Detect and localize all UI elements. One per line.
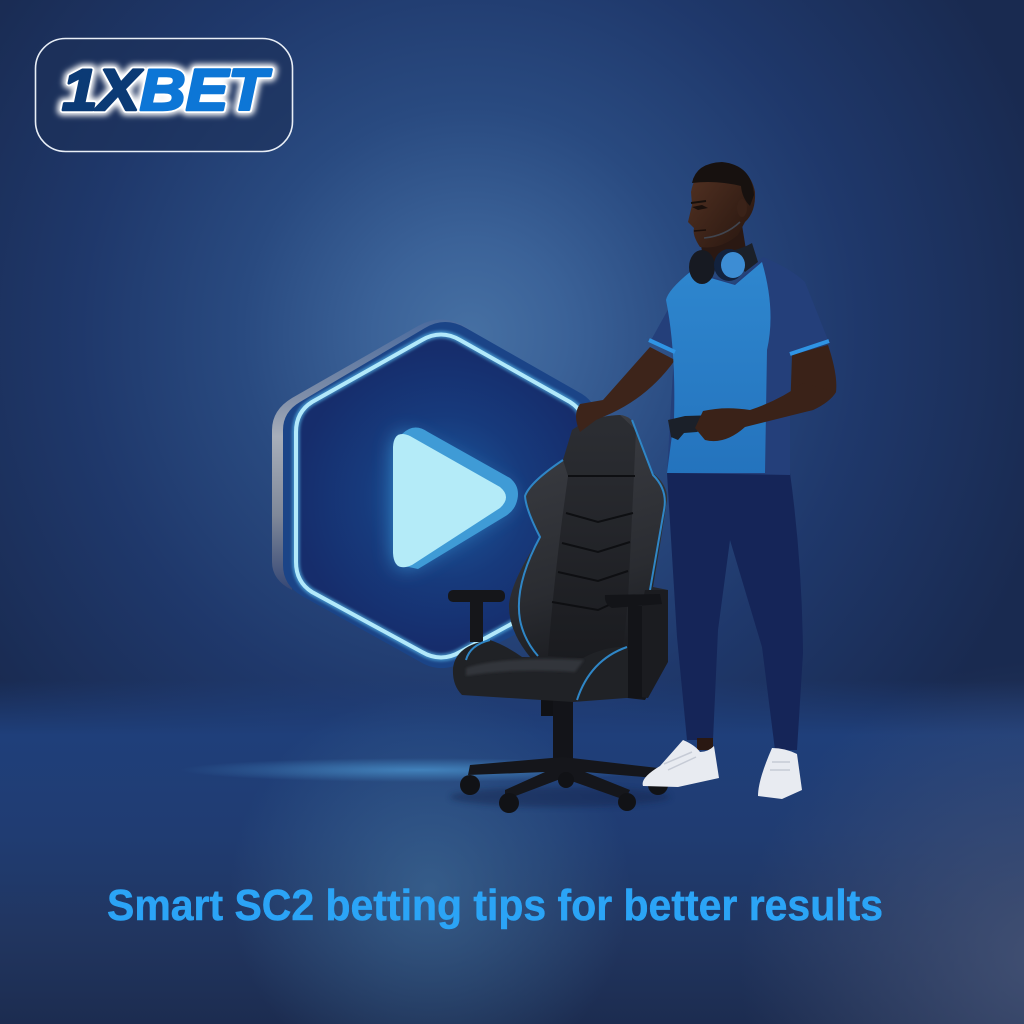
chair centre padding — [548, 415, 636, 660]
gaming chair — [448, 415, 670, 813]
headset — [689, 222, 758, 284]
brow — [691, 201, 706, 203]
person — [576, 162, 836, 799]
hexagon outer body — [283, 322, 598, 668]
play icon glow — [394, 434, 512, 568]
chair base — [450, 700, 670, 813]
neck — [700, 225, 748, 268]
hexagon play badge — [272, 320, 598, 668]
play icon — [393, 434, 506, 567]
logo badge — [36, 38, 292, 152]
logo wordmark: 1XBET — [62, 58, 272, 123]
eye — [692, 205, 708, 210]
hexagon neon ring — [296, 334, 586, 658]
left arm — [576, 347, 675, 432]
hair — [692, 162, 754, 206]
chair seat — [453, 640, 640, 702]
ear — [737, 199, 747, 217]
chair back — [509, 415, 668, 700]
chair lower right wing — [625, 590, 668, 698]
chair right armrest — [605, 594, 662, 698]
caption: Smart SC2 betting tips for better results — [107, 881, 883, 930]
shirt — [649, 257, 829, 475]
hexagon rim — [272, 320, 470, 590]
seat highlight — [466, 659, 584, 676]
logo wordmark: 1XBET — [62, 58, 272, 123]
right shoe — [758, 748, 802, 799]
chair stitching — [552, 476, 635, 610]
chair piping — [519, 420, 665, 656]
head — [688, 162, 755, 248]
left ankle — [697, 738, 713, 750]
hexagon face — [296, 334, 586, 658]
upper right arm — [790, 345, 836, 415]
forearm and hand — [695, 383, 836, 441]
play icon edge — [402, 427, 518, 569]
mouth — [694, 230, 706, 231]
game controller — [668, 415, 717, 440]
pants — [667, 473, 803, 750]
chair left armrest — [448, 590, 505, 642]
left shoe — [643, 740, 719, 787]
logo wordmark: 1XBET — [62, 58, 272, 123]
